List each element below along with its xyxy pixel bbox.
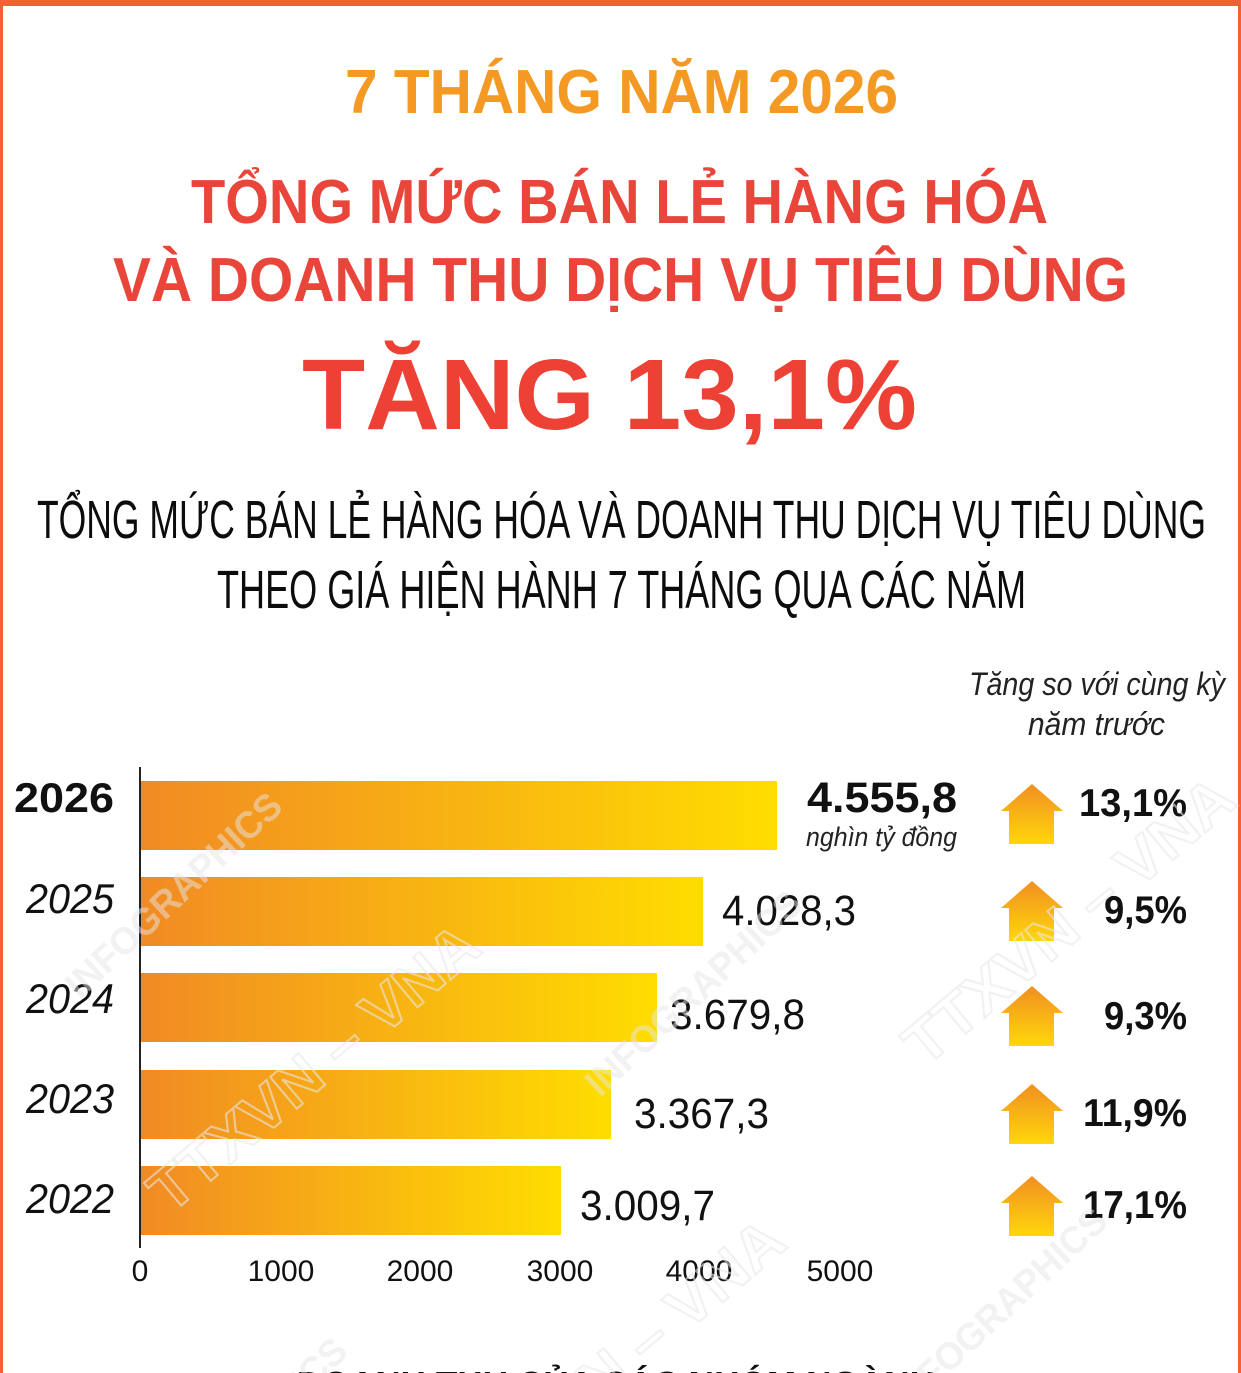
chart heading xyxy=(37,490,1206,620)
watermarks xyxy=(57,763,1241,1373)
axis tick labels: 1000 xyxy=(248,1255,314,1288)
bar values: 4.028,3 xyxy=(722,887,856,935)
title: main heading xyxy=(113,167,1128,315)
growth percentages: 9,3% xyxy=(1104,995,1187,1038)
icon: up arrow 2022 xyxy=(1001,1176,1063,1236)
headline figure: TĂNG 13,1% xyxy=(302,339,917,451)
bar 2022 xyxy=(141,1166,561,1235)
growth percentages: 11,9% xyxy=(1083,1092,1187,1135)
axis tick labels: 3000 xyxy=(527,1255,593,1288)
bar values: nghìn tỷ đồng xyxy=(806,822,957,852)
watermarks: INFOGRAPHICS xyxy=(57,785,291,1007)
bar values: 3.009,7 xyxy=(580,1182,715,1230)
bar 2026 xyxy=(141,781,777,850)
year labels: 2025 xyxy=(25,875,115,922)
watermarks: TTXVN – VNA xyxy=(890,763,1241,1078)
axis tick labels: 0 xyxy=(132,1255,148,1288)
bar 2025 xyxy=(141,877,703,946)
icon: up arrow 2025 xyxy=(1001,881,1063,941)
bar values: 3.679,8 xyxy=(670,991,805,1039)
year labels: 2023 xyxy=(25,1075,114,1122)
bar chart xyxy=(14,767,957,1288)
icon: up arrow 2023 xyxy=(1001,1084,1063,1144)
watermarks: TTXVN – VNA xyxy=(135,910,492,1225)
year labels xyxy=(14,774,115,1222)
growth percentages: 9,5% xyxy=(1104,889,1187,932)
growth percentages: 17,1% xyxy=(1083,1184,1187,1227)
bar values: 3.367,3 xyxy=(634,1090,769,1138)
bar values xyxy=(580,774,957,1230)
year labels: 2024 xyxy=(25,975,114,1022)
axis tick labels: 2000 xyxy=(387,1255,453,1288)
icon: up arrow 2026 xyxy=(1001,784,1063,844)
bar 2023 xyxy=(141,1070,611,1139)
year labels: 2022 xyxy=(25,1175,114,1222)
watermarks: INFOGRAPHICS xyxy=(577,883,811,1105)
axis tick labels: 4000 xyxy=(666,1255,732,1288)
bar 2024 xyxy=(141,973,657,1042)
title: main heading: VÀ DOANH THU DỊCH VỤ TIÊU DÙNG xyxy=(113,246,1128,315)
bar values: 4.555,8 xyxy=(807,774,957,822)
icon: up arrow 2024 xyxy=(1001,986,1063,1046)
growth percentages: 13,1% xyxy=(1079,782,1187,825)
growth arrows xyxy=(1001,784,1063,1236)
growth column heading: năm trước xyxy=(1028,706,1165,742)
title: period: 7 THÁNG NĂM 2026 xyxy=(345,58,898,127)
growth percentages xyxy=(1079,782,1187,1227)
title: main heading: TỔNG MỨC BÁN LẺ HÀNG HÓA xyxy=(191,167,1048,237)
axis tick labels xyxy=(132,1255,873,1288)
axis line xyxy=(139,767,141,1248)
growth column heading xyxy=(969,666,1227,742)
year labels: 2026 xyxy=(14,774,114,821)
axis tick labels: 5000 xyxy=(807,1255,873,1288)
